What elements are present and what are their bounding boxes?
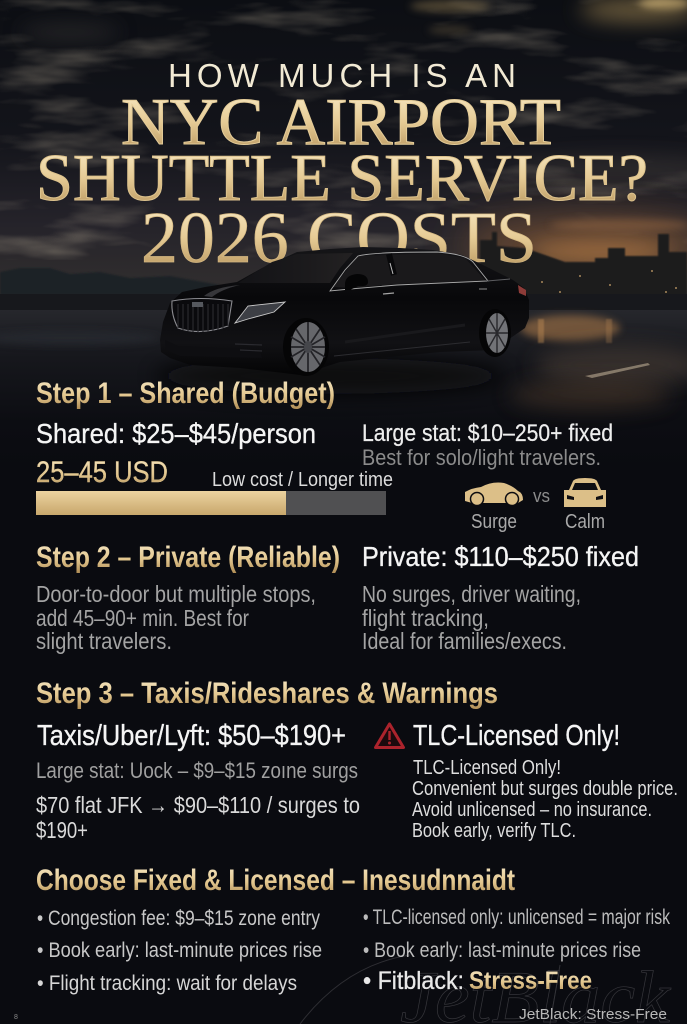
panel: step 3 taxis and warnings <box>36 677 678 843</box>
door handles and trim <box>383 293 394 294</box>
title line: how much is an: HOW MUCH IS AN <box>168 57 516 94</box>
heading: choose fixed: Choose Fixed & Licensed – Inesudnnaidt <box>36 864 515 897</box>
warning text: TLC-Licensed Only! <box>413 757 561 779</box>
label: surge: Surge <box>471 511 517 533</box>
panel: step 2 private reliable <box>36 541 639 654</box>
stat: taxi price: Taxis/Uber/Lyft: $50–$190+ <box>37 720 346 752</box>
label: calm: Calm <box>565 511 605 533</box>
bar chart: cost versus time <box>36 491 386 515</box>
side mirror <box>345 274 368 290</box>
label: vs: vs <box>533 486 550 506</box>
description: no surges: flight tracking, <box>362 605 489 631</box>
bullet: fitblack stress-free: Stress-Free <box>469 967 592 995</box>
heading: step 2: Step 2 – Private (Reliable) <box>36 541 340 574</box>
bullet: fitblack stress-free <box>363 967 592 995</box>
stat: private price: Private: $110–$250 fixed <box>362 541 639 572</box>
bar label: Low cost / Longer time <box>212 469 393 491</box>
description: door to door: add 45–90+ min. Best for <box>36 605 249 631</box>
title line: NYC airport: NYC AIRPORT <box>121 85 561 159</box>
description: flat fare: $190+ <box>36 817 88 843</box>
title line: shuttle service: SHUTTLE SERVICE? <box>36 141 648 215</box>
description: flat fare <box>36 792 360 843</box>
footer tag: JetBlack: Stress-Free <box>519 1006 667 1023</box>
stat: shared price: Shared: $25–$45/person <box>36 418 316 449</box>
icon: warning triangle <box>376 724 404 748</box>
grille <box>172 298 232 332</box>
description: large stat: Large stat: Uock – $9–$15 zoıne surgs <box>36 758 358 783</box>
bullet list: right <box>363 906 670 962</box>
hood highlights <box>204 285 240 297</box>
description: best for: Best for solo/light travelers. <box>362 445 601 470</box>
bullet list: left <box>37 907 322 995</box>
title line: 2026 costs: 2026 COSTS <box>141 197 537 278</box>
description: door to door: slight travelers. <box>36 628 172 654</box>
bullet list: left: • Congestion fee: $9–$15 zone entry <box>37 907 320 930</box>
page number: 8 <box>14 1014 18 1021</box>
heading: step 3: Step 3 – Taxis/Rideshares & Warnings <box>36 677 498 710</box>
stat: usd range: 25–45 USD <box>36 456 168 489</box>
black limousine <box>155 247 529 394</box>
tail light <box>518 285 526 296</box>
description: no surges: Ideal for families/execs. <box>362 628 567 654</box>
headlight <box>235 302 285 323</box>
icon: side view car <box>465 482 523 506</box>
warning text <box>412 757 678 842</box>
windshield <box>238 253 353 283</box>
description: door to door: Door-to-door but multiple stops, <box>36 581 316 607</box>
side windows <box>333 253 486 288</box>
description: no surges: No surges, driver waiting, <box>362 581 581 607</box>
bullet list: right: • Book early: last-minute prices rise <box>363 939 641 962</box>
watermark: JetBlack script <box>300 955 671 1024</box>
rear wheel <box>479 309 511 357</box>
panel: step 1 shared budget <box>36 377 613 533</box>
description: flat fare: $70 flat JFK → $90–$110 / surges to <box>36 792 360 818</box>
description: door to door <box>36 581 316 654</box>
bullet list: left: • Book early: last-minute prices rise <box>37 939 322 962</box>
heading: step 1: Step 1 – Shared (Budget) <box>36 377 335 410</box>
stat: large stat fixed: Large stat: $10–250+ fixed <box>362 420 613 447</box>
front wheel <box>283 318 329 376</box>
warning text: Book early, verify TLC. <box>412 820 576 842</box>
icon: front view car <box>564 478 606 507</box>
background scene: night sky, skyline and wet tarmac <box>0 0 687 470</box>
title <box>36 57 648 278</box>
warning heading: TLC-Licensed Only! <box>413 720 620 752</box>
bullet: fitblack stress-free: • Fitblack: <box>363 967 464 995</box>
description: no surges <box>362 581 581 654</box>
bullet list: left: • Flight tracking: wait for delays <box>37 972 297 995</box>
panel: choose fixed and licensed <box>14 864 671 1024</box>
lower bumper <box>165 340 262 358</box>
